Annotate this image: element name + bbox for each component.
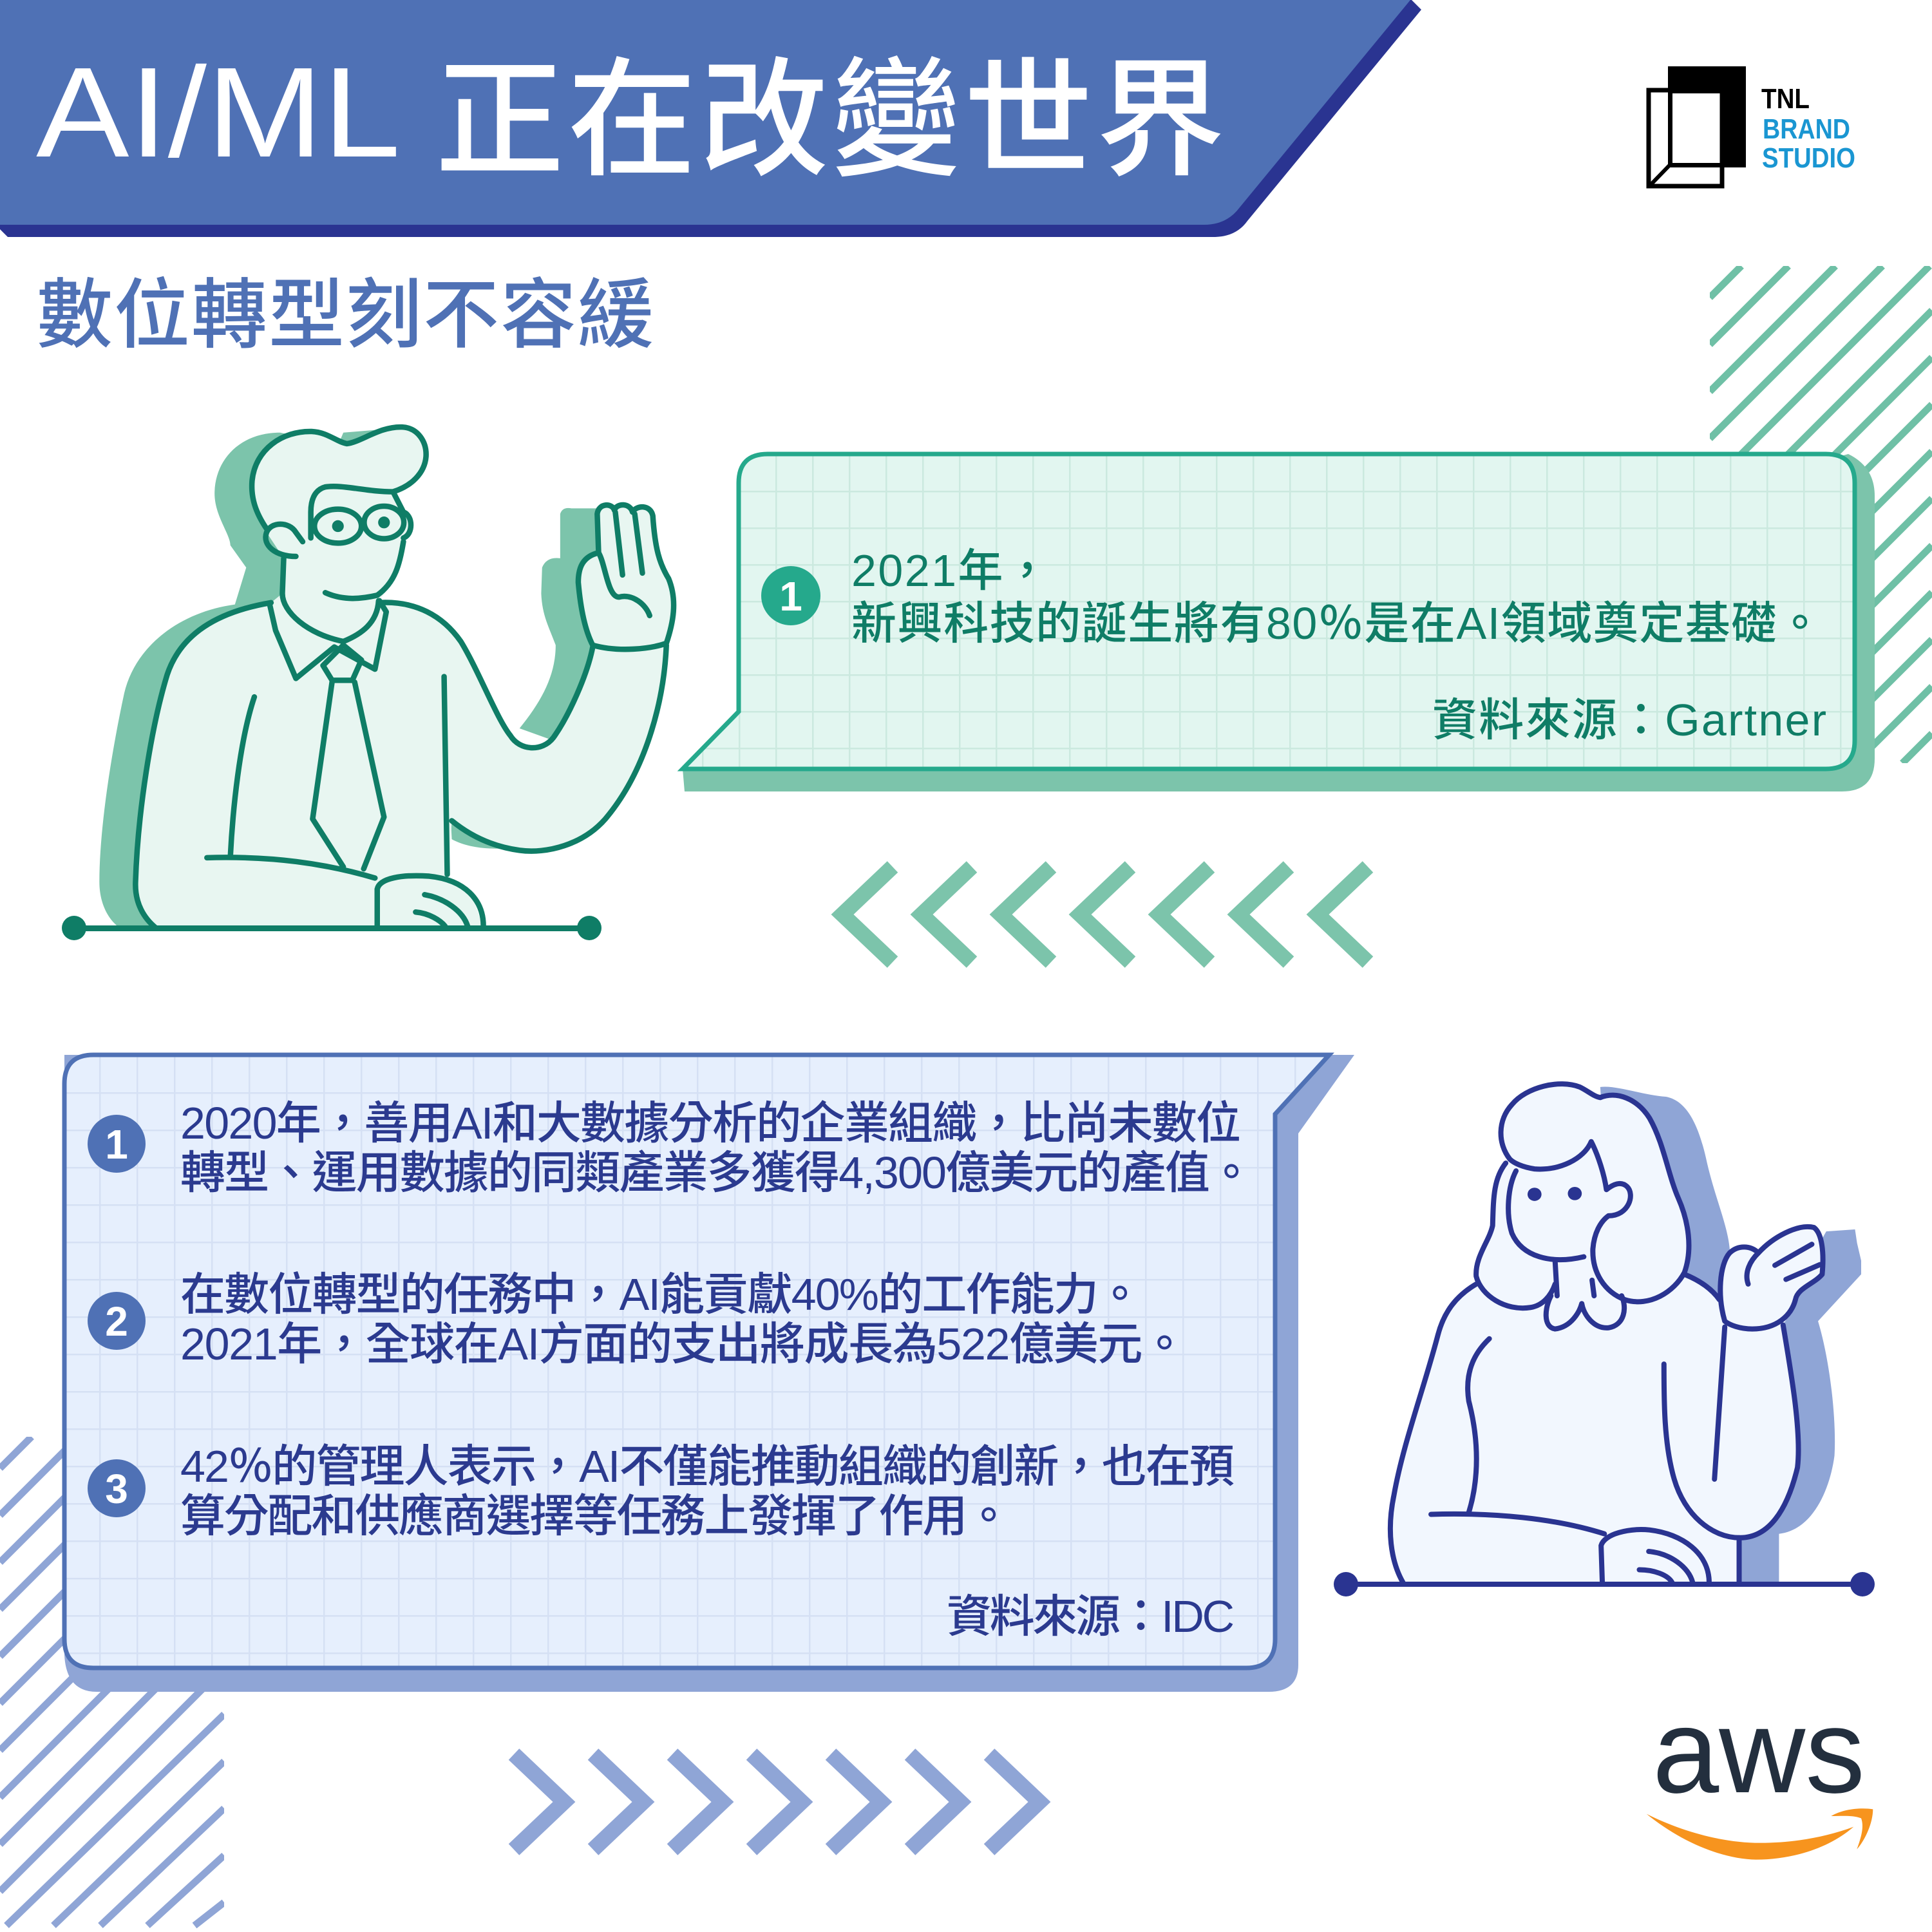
title: 正在改變世界 <box>435 15 1225 202</box>
TNL Brand Studio logo: TNL <box>1761 83 1810 115</box>
man line art <box>135 427 674 928</box>
chevrons pointing left <box>842 867 1368 962</box>
TNL Brand Studio logo: BRAND <box>1763 113 1850 145</box>
title <box>36 15 1225 202</box>
man shadow <box>99 429 598 926</box>
item 2 text: 2021年，全球在AI方面的支出將成長為522億美元。 <box>180 1319 1187 1369</box>
man ground line <box>62 916 601 940</box>
illustration: woman gesturing <box>1334 1084 1875 1596</box>
TNL Brand Studio logo <box>1649 66 1855 186</box>
badge 3 <box>88 1459 146 1517</box>
woman line art <box>1390 1084 1823 1582</box>
woman shadow <box>1600 1086 1861 1582</box>
badge 1: 1 <box>105 1121 128 1168</box>
badge 2 <box>88 1292 146 1350</box>
item 2 text <box>180 1269 1187 1369</box>
chevrons pointing right <box>514 1754 1039 1850</box>
source: 資料來源：IDC <box>947 1591 1235 1642</box>
number badge: 1 <box>779 573 802 620</box>
TNL Brand Studio logo: STUDIO <box>1762 142 1855 174</box>
statement text: 2021年， <box>851 545 1050 596</box>
AWS logo: aws <box>1653 1685 1865 1818</box>
header banner <box>0 0 1421 237</box>
item 2 text: 在數位轉型的任務中，AI能貢獻40%的工作能力。 <box>180 1269 1142 1320</box>
man body fill <box>135 427 674 928</box>
item 3 text: 算分配和供應商選擇等任務上發揮了作用。 <box>180 1491 1011 1541</box>
woman ground line <box>1334 1572 1875 1596</box>
item 1 text: 轉型、運用數據的同類產業多獲得4,300億美元的產值。 <box>180 1148 1254 1198</box>
diagonal stripes bottom left <box>0 1437 224 1926</box>
title: AI/ML <box>36 41 401 184</box>
panel: green speech bubble <box>683 454 1875 791</box>
diagonal stripes top right <box>1710 266 1932 763</box>
item 1 text: 2020年，善用AI和大數據分析的企業組織，比尚未數位 <box>180 1098 1241 1148</box>
number badge <box>761 566 820 625</box>
source: 資料來源：Gartner <box>1432 695 1826 745</box>
panel: blue speech bubble <box>64 1055 1354 1692</box>
woman body fill <box>1390 1084 1823 1582</box>
subtitle: 數位轉型刻不容緩 <box>37 253 654 363</box>
item 3 text <box>180 1441 1235 1541</box>
statement text <box>851 545 1823 649</box>
illustration: man with raised hand <box>62 427 674 940</box>
statement text: 新興科技的誕生將有80％是在AI領域奠定基礎。 <box>851 598 1823 649</box>
item 1 text <box>180 1098 1254 1198</box>
badge 2: 2 <box>105 1298 128 1345</box>
item 3 text: 42％的管理人表示，AI不僅能推動組織的創新，也在預 <box>180 1441 1235 1492</box>
badge 3: 3 <box>105 1466 128 1512</box>
badge 1 <box>88 1115 146 1173</box>
